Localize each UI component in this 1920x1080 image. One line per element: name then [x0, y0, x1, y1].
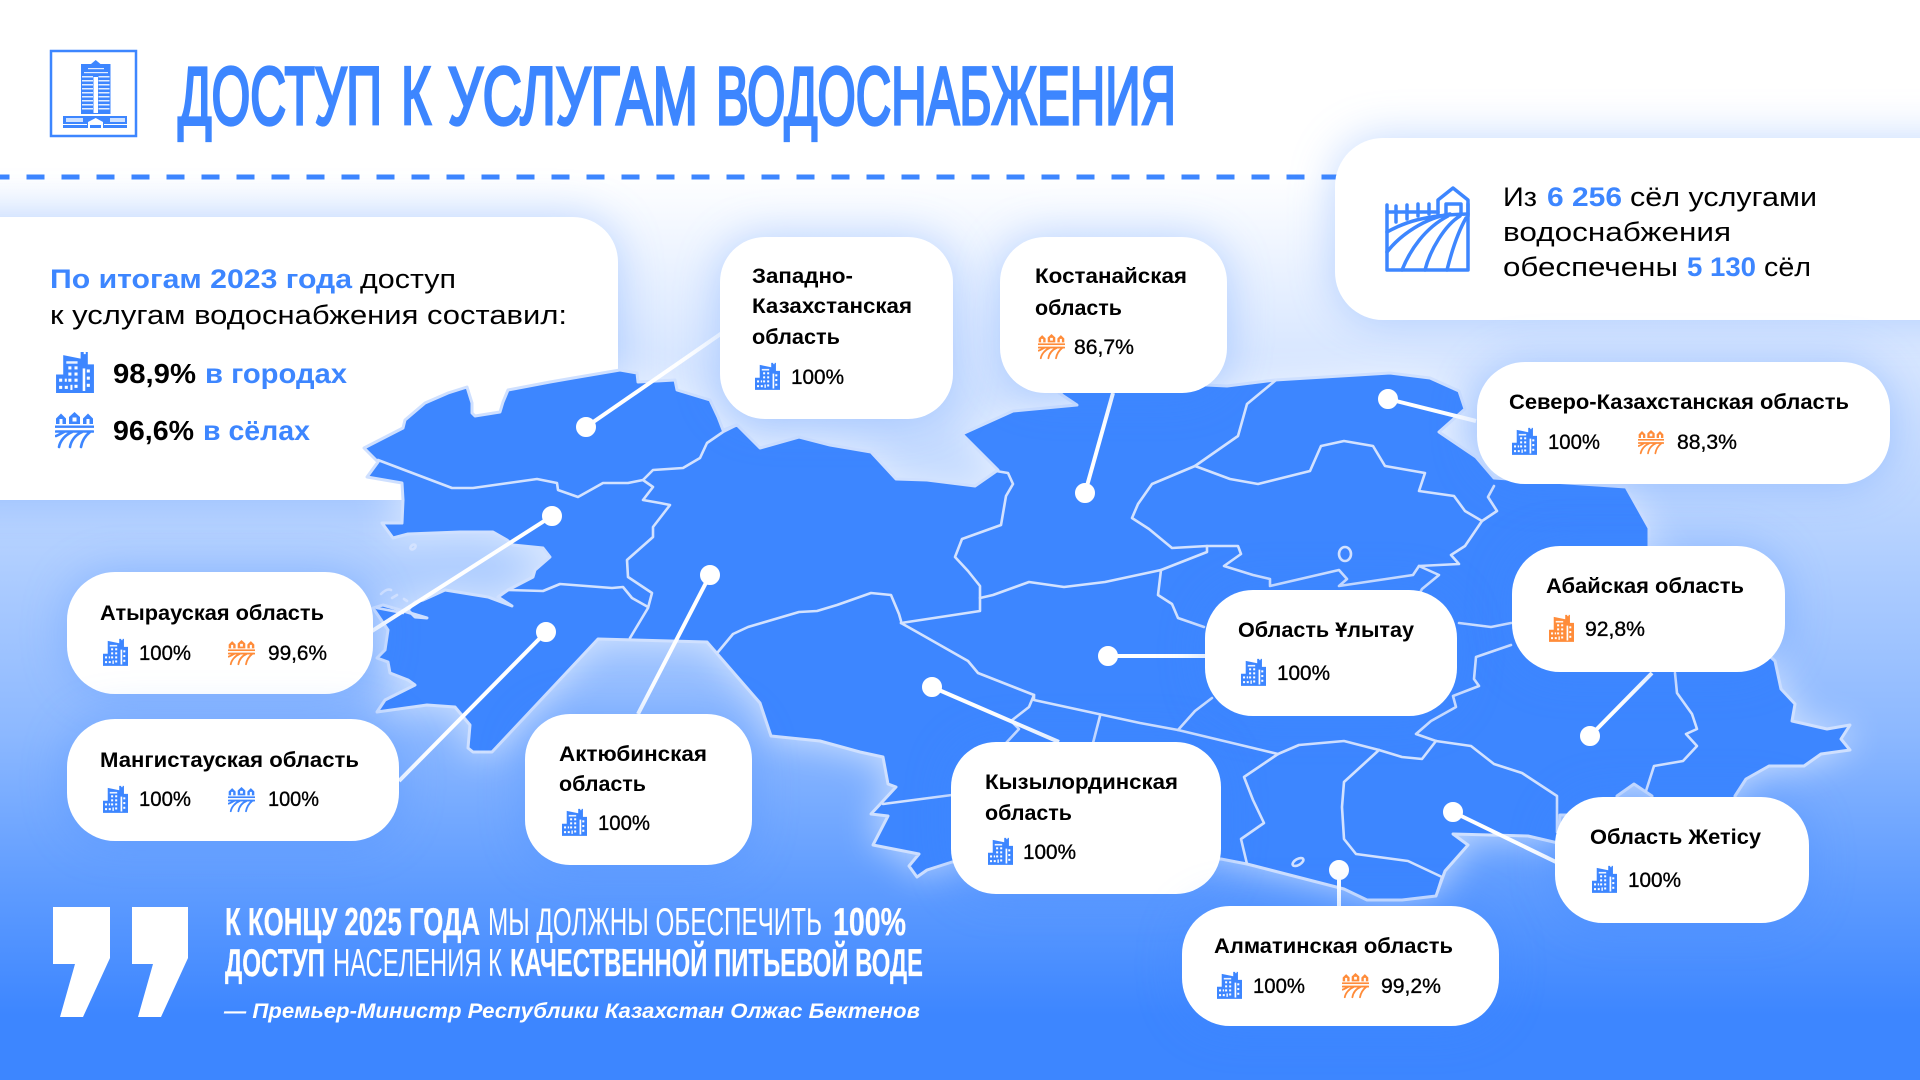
icon: village — [1038, 334, 1065, 358]
value: villages: 88,3% — [1677, 431, 1737, 454]
region name: Мангистауская область — [100, 749, 359, 772]
villages text: сёл — [1764, 252, 1811, 282]
map of Kazakhstan — [364, 370, 1850, 900]
region name: область — [559, 773, 646, 796]
title: ВОДОСНАБЖЕНИЯ — [716, 51, 1176, 142]
quote text: ДОСТУП — [225, 942, 325, 985]
villages text: 6 256 — [1547, 182, 1622, 212]
value: 100% — [791, 366, 844, 389]
card: Актюбинская область — [525, 714, 752, 865]
stat: cities: 98,9% — [113, 358, 196, 389]
value: cities: 100% — [1253, 975, 1305, 998]
region name: Северо-Казахстанская область — [1509, 391, 1849, 414]
icon: village — [228, 640, 255, 664]
title: УСЛУГАМ — [448, 51, 698, 142]
region name: область — [752, 326, 840, 349]
region name: Кызылординская — [985, 771, 1178, 794]
stat: villages: 96,6% — [113, 415, 194, 446]
region name: область — [985, 802, 1072, 825]
icon: village — [1638, 430, 1664, 453]
region name: Абайская область — [1546, 575, 1744, 598]
title: К — [401, 51, 431, 142]
region name: Костанайская — [1035, 265, 1187, 288]
quote attribution: — Премьер-Министр Республики Казахстан Олжас Бектенов — [223, 1000, 920, 1023]
icon: city — [1512, 428, 1537, 455]
dashed header divider — [0, 174, 1340, 180]
quote text: НАСЕЛЕНИЯ К — [333, 942, 502, 985]
title — [178, 51, 1176, 142]
region name: область — [1035, 297, 1122, 320]
card: Костанайская область — [1000, 237, 1227, 393]
connector lines and dots — [372, 333, 1652, 906]
region name — [559, 743, 707, 796]
icon: city — [103, 786, 128, 813]
card: Западно-Казахстанская область — [720, 237, 953, 419]
card: Атырауская область — [67, 572, 373, 694]
panel: villages served — [1335, 138, 1920, 320]
quote text — [225, 901, 923, 985]
card: Абайская область — [1512, 546, 1785, 672]
villages text: сёл услугами — [1630, 182, 1817, 212]
quote text: МЫ ДОЛЖНЫ ОБЕСПЕЧИТЬ — [488, 901, 822, 944]
value: villages: 99,6% — [268, 642, 327, 665]
icon: village — [228, 787, 255, 811]
icon: city — [103, 639, 128, 666]
intro text: доступ — [360, 264, 456, 294]
value: cities: 100% — [1548, 431, 1600, 454]
icon: city — [1217, 972, 1242, 999]
value: 92,8% — [1585, 618, 1645, 641]
icon: city — [1549, 615, 1574, 642]
icon: city — [988, 838, 1013, 865]
icon: city — [1241, 659, 1266, 686]
value: 100% — [1628, 869, 1681, 892]
value: 100% — [1277, 662, 1330, 685]
stat: cities: в городах — [205, 358, 347, 389]
villages text: Из — [1503, 182, 1537, 212]
icon: village — [1342, 973, 1369, 997]
quote text: К КОНЦУ 2025 ГОДА — [225, 901, 480, 944]
villages text: 5 130 — [1687, 252, 1756, 282]
region name — [1035, 265, 1187, 320]
value: villages: 99,2% — [1381, 975, 1441, 998]
stat: villages — [113, 415, 310, 446]
stat: villages: в сёлах — [203, 415, 310, 446]
value: 86,7% — [1074, 336, 1134, 359]
quote text: КАЧЕСТВЕННОЙ ПИТЬЕВОЙ ВОДЕ — [510, 940, 923, 985]
icon: city — [562, 809, 587, 836]
region name: Область Жетісу — [1590, 826, 1761, 849]
icon: city — [1592, 866, 1617, 893]
icon: city — [56, 352, 94, 393]
card: Область Жетісу — [1555, 797, 1809, 923]
icon: quotation marks — [53, 907, 188, 1017]
intro text: По итогам 2023 года — [50, 264, 353, 294]
intro text — [50, 264, 567, 330]
card: Кызылординская область — [951, 742, 1221, 894]
intro text: к услугам водоснабжения составил: — [50, 300, 567, 330]
card: Область Ұлытау — [1205, 590, 1457, 716]
value: cities: 100% — [139, 642, 191, 665]
value: cities: 100% — [139, 788, 191, 811]
logo: government building — [51, 51, 136, 136]
quote text: 100% — [833, 901, 906, 944]
region name — [752, 265, 912, 349]
icon: city — [755, 363, 780, 390]
panel: national totals — [0, 217, 618, 500]
region name: Казахстанская — [752, 295, 912, 318]
card: Мангистауская область — [67, 719, 399, 841]
value: 100% — [1023, 841, 1076, 864]
card: Алматинская область — [1182, 906, 1499, 1026]
villages text — [1503, 182, 1817, 282]
region name: Область Ұлытау — [1238, 619, 1414, 642]
stat: cities — [113, 358, 347, 389]
region name: Алматинская область — [1214, 935, 1453, 958]
region name: Актюбинская — [559, 743, 707, 766]
villages text: водоснабжения — [1503, 217, 1731, 247]
title: ДОСТУП — [178, 51, 382, 142]
value: 100% — [598, 812, 650, 835]
icon: village — [55, 412, 94, 447]
region name: Атырауская область — [100, 602, 324, 625]
icon: farm field — [1387, 188, 1468, 270]
region name — [985, 771, 1178, 825]
value: villages: 100% — [268, 788, 319, 811]
region name: Западно- — [752, 265, 853, 288]
villages text: обеспечены — [1503, 252, 1678, 282]
card: Северо-Казахстанская область — [1477, 362, 1890, 484]
